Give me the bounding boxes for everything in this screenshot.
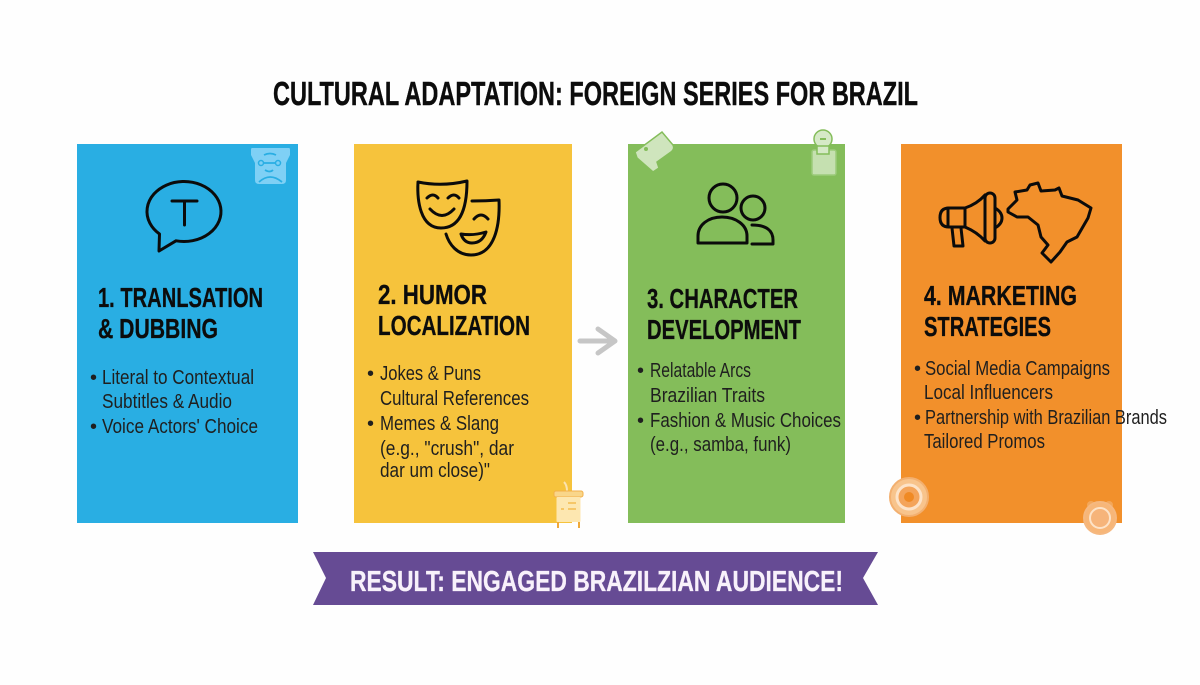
icon: speech bubble with T — [147, 182, 221, 251]
text: marketing bullets: Social Media Campaigns — [925, 358, 1110, 380]
panel: translation and dubbing — [77, 144, 298, 523]
heading: marketing strategies: 4. MARKETING — [924, 280, 1077, 311]
text: translation bullets — [90, 367, 258, 438]
text: character bullets: Brazilian Traits — [650, 385, 765, 407]
icon: map of Brazil — [1008, 183, 1091, 262]
text: humor bullets: • — [367, 413, 374, 435]
text: character bullets: (e.g., samba, funk) — [650, 434, 791, 456]
icon: clock badge — [1084, 501, 1116, 534]
text: translation bullets: Subtitles & Audio — [102, 391, 232, 413]
heading: humor localization — [378, 279, 530, 341]
icon: bulb clip badge — [812, 130, 836, 175]
icon: small podium — [554, 482, 583, 528]
text: marketing bullets: Local Influencers — [924, 382, 1053, 404]
heading: marketing strategies — [924, 280, 1077, 342]
panel: character development — [628, 130, 845, 523]
text: humor bullets: • — [367, 363, 374, 385]
text: translation bullets: • — [90, 416, 97, 438]
icon: tag badge — [635, 132, 674, 172]
heading: translation and dubbing: & DUBBING — [98, 313, 218, 344]
banner: result — [313, 552, 878, 605]
text: marketing bullets: • — [914, 407, 921, 429]
text: translation bullets: Literal to Contextual — [102, 367, 254, 389]
heading: character development: 3. CHARACTER — [647, 283, 798, 314]
text: humor bullets: Jokes & Puns — [380, 363, 481, 385]
text: humor bullets: (e.g., "crush", dar — [380, 438, 514, 460]
heading: marketing strategies: STRATEGIES — [924, 311, 1051, 342]
icon: target badge — [890, 478, 928, 516]
text: translation bullets: • — [90, 367, 97, 389]
text: marketing bullets: Tailored Promos — [924, 431, 1045, 453]
icon: theater masks — [418, 181, 499, 255]
text: humor bullets: Cultural References — [380, 388, 529, 410]
text: marketing bullets — [914, 358, 1167, 453]
icon: megaphone — [940, 193, 1002, 246]
text: character bullets: • — [637, 410, 644, 432]
text: humor bullets: Memes & Slang — [380, 413, 499, 435]
panel: humor localization — [354, 144, 583, 528]
text: humor bullets: dar um close)" — [380, 460, 490, 482]
icon: two people — [698, 184, 773, 244]
heading: humor localization: LOCALIZATION — [378, 310, 530, 341]
arrow: grey process arrow — [580, 329, 615, 353]
panel: marketing strategies — [890, 144, 1167, 534]
text: character bullets — [637, 360, 841, 456]
text: translation bullets: Voice Actors' Choice — [102, 416, 258, 438]
heading: translation and dubbing — [98, 282, 263, 344]
title: CULTURAL ADAPTATION: FOREIGN SERIES FOR BRAZIL — [273, 75, 918, 112]
text: character bullets: • — [637, 360, 644, 382]
heading: translation and dubbing: 1. TRANLSATION — [98, 282, 263, 313]
banner text: RESULT: ENGAGED BRAZILZIAN AUDIENCE! — [350, 566, 843, 598]
heading: character development — [647, 283, 801, 345]
heading: humor localization: 2. HUMOR — [378, 279, 487, 310]
text: character bullets: Fashion & Music Choices — [650, 410, 841, 432]
heading: character development: DEVELOPMENT — [647, 314, 801, 345]
text: character bullets: Relatable Arcs — [650, 360, 751, 382]
icon: sad face badge — [251, 148, 290, 184]
text: humor bullets — [367, 363, 529, 482]
text: marketing bullets: • — [914, 358, 921, 380]
